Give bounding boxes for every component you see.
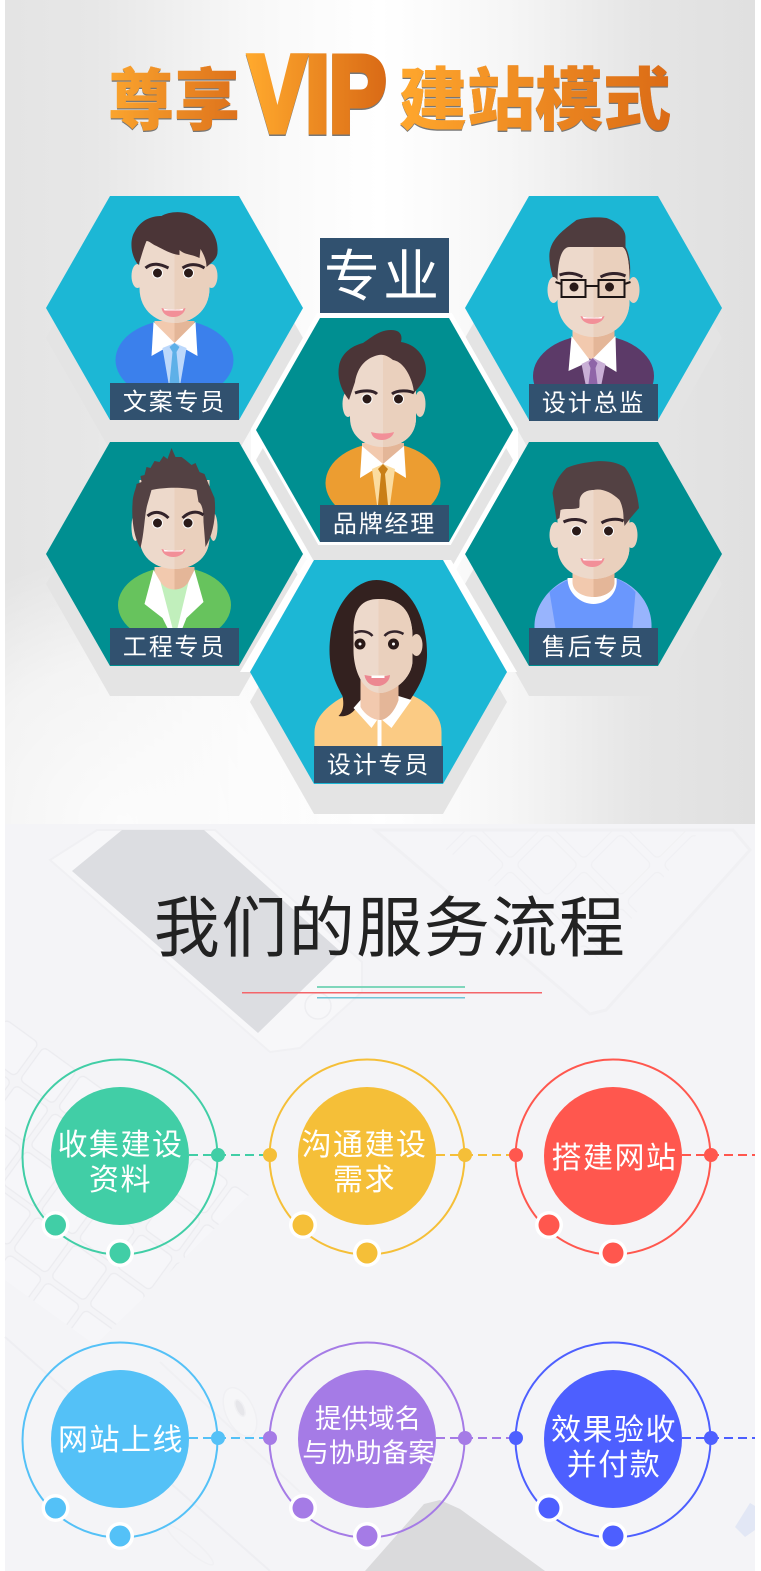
step: 沟通建设需求: 沟通建设 [302, 1129, 428, 1162]
avatar: copywriter [116, 212, 234, 400]
panel: 设计专员 [240, 560, 517, 814]
label: 售后专员 [529, 628, 658, 665]
earphones [163, 1383, 264, 1569]
panel: 设计总监 [465, 196, 722, 450]
faint phone outline lower left [5, 1337, 270, 1571]
label: 文案专员: 文案专员 [123, 389, 226, 416]
panel: 售后专员 [465, 442, 722, 696]
step: 效果验收并付款: 并付款 [567, 1449, 661, 1482]
panel: 品牌经理 [256, 318, 513, 572]
avatar: female designer [314, 580, 442, 747]
step: 提供域名与协助备案: 提供域名 [315, 1404, 421, 1434]
panel: 工程专员 [46, 442, 303, 696]
title: 尊享VIP建站模式: 尊享 [108, 47, 240, 144]
step: 收集建设资料: 资料 [89, 1164, 152, 1197]
step: 收集建设资料 [22, 1060, 225, 1267]
step: 网站上线: 网站上线 [58, 1424, 184, 1457]
label: 设计总监: 设计总监 [542, 390, 645, 417]
connector dashes row 2 [189, 1437, 755, 1439]
avatar: design director [533, 217, 654, 384]
title: 尊享VIP建站模式: VIP [249, 33, 386, 154]
background: desk objects [5, 830, 755, 1571]
bottom panel background [5, 824, 755, 1571]
step: 收集建设资料: 收集建设 [58, 1129, 184, 1162]
avatar: brand manager [326, 330, 440, 523]
heading: 我们的服务流程: 我们的服务流程 [154, 891, 626, 965]
label: 售后专员: 售后专员 [542, 634, 645, 661]
step: 搭建网站: 搭建网站 [552, 1142, 678, 1175]
label: 品牌经理: 品牌经理 [333, 511, 436, 538]
avatar: engineer [118, 448, 231, 643]
title: 尊享VIP建站模式: 建站模式 [399, 46, 671, 146]
title: 尊享VIP建站模式: 建站模式 [399, 45, 671, 144]
heading badge: 专业: 专业 [324, 245, 442, 308]
title: 尊享VIP建站模式: 尊享 [108, 48, 240, 146]
heading underline [242, 986, 542, 998]
label: 工程专员 [110, 628, 239, 665]
step: 提供域名与协助备案 [263, 1342, 472, 1550]
label: 设计专员: 设计专员 [327, 752, 430, 779]
step: 效果验收并付款 [509, 1342, 718, 1550]
step: 沟通建设需求 [263, 1060, 472, 1267]
avatar: after-sales [534, 461, 652, 628]
title: 尊享VIP建站模式 [108, 33, 671, 156]
step: 提供域名与协助备案: 与协助备案 [302, 1438, 435, 1468]
phone top [50, 830, 362, 1052]
connector dashes row 1 [189, 1154, 755, 1156]
label: 品牌经理 [320, 505, 449, 542]
step: 沟通建设需求: 需求 [333, 1164, 396, 1197]
tablet [375, 830, 750, 1014]
keyboard [5, 1015, 252, 1345]
step: 网站上线 [22, 1342, 225, 1550]
phone bottom [365, 1500, 545, 1571]
step: 搭建网站 [509, 1060, 718, 1267]
panel: 文案专员 [46, 196, 303, 450]
small pen [735, 1503, 755, 1537]
top panel background [5, 0, 755, 824]
step: 效果验收并付款: 效果验收 [551, 1414, 677, 1447]
title: 尊享VIP建站模式: VIP [249, 34, 386, 156]
label: 文案专员 [110, 383, 239, 420]
label: 设计专员 [314, 746, 443, 783]
label: 工程专员: 工程专员 [123, 634, 226, 661]
label: 设计总监 [529, 384, 658, 421]
